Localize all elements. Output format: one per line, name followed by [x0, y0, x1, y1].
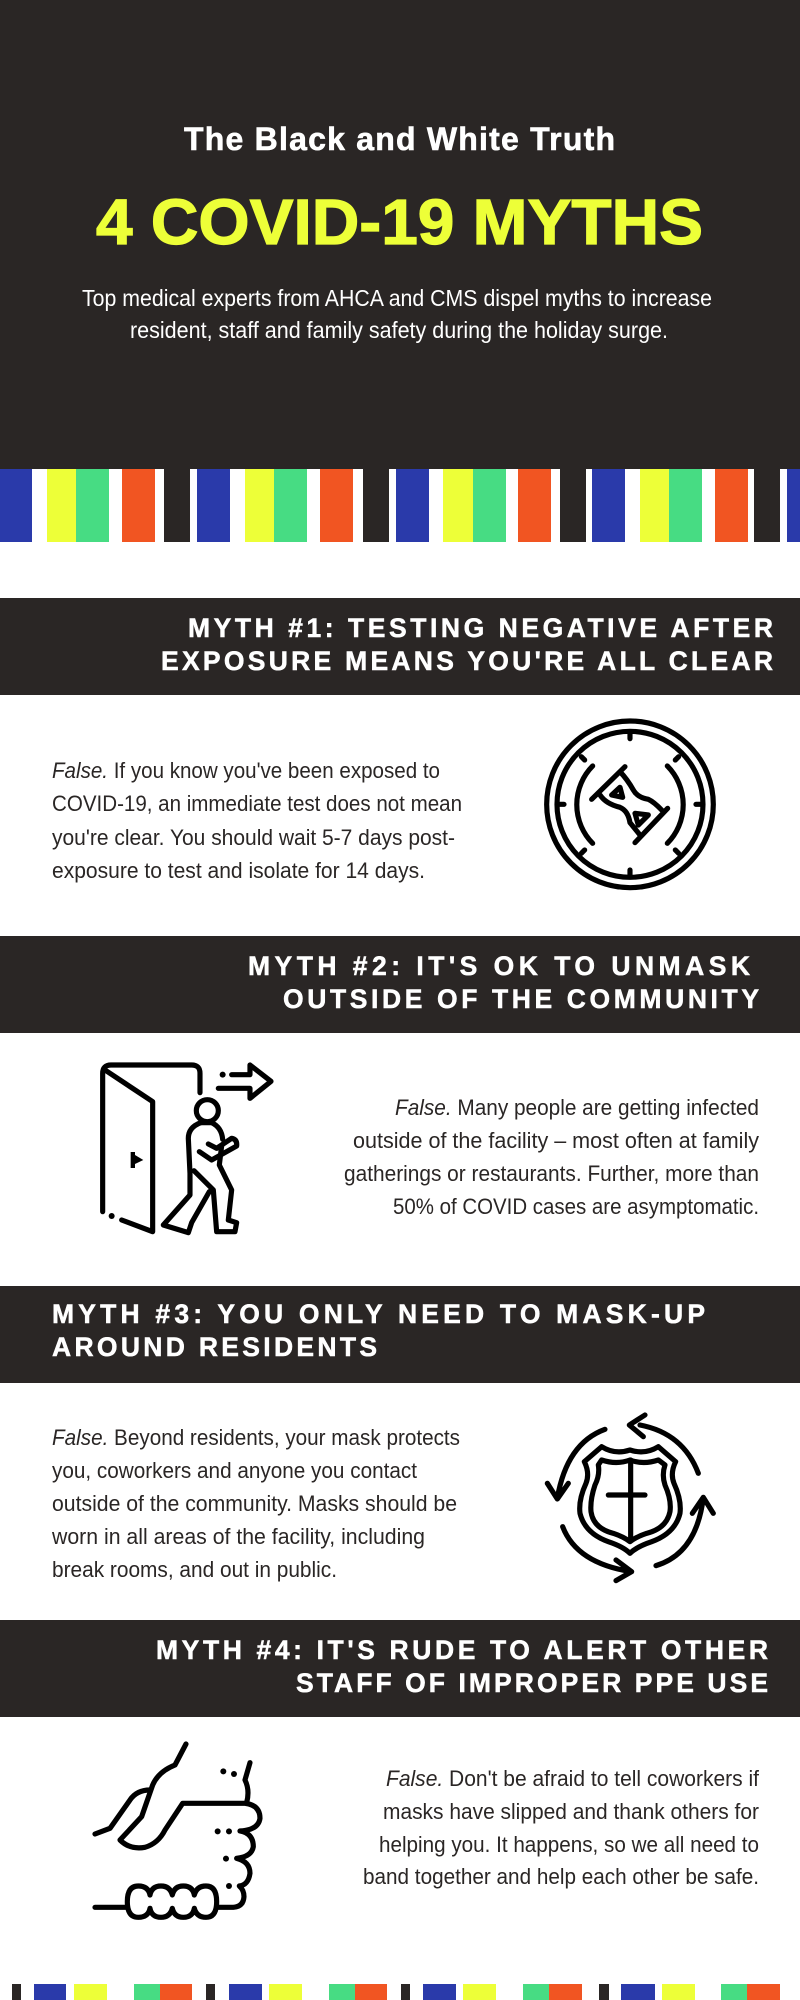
icon: handshake — [95, 1744, 260, 1917]
colour stripe band: top — [0, 469, 800, 542]
text: myth 4 explanation: False. Don't be afraid to tell coworkers if — [386, 1766, 760, 1791]
heading bar: myth 1: EXPOSURE MEANS YOU'RE ALL CLEAR — [161, 646, 773, 676]
heading bar: myth 3: MYTH #3: YOU ONLY NEED TO MASK-UP — [52, 1299, 705, 1329]
intro text — [82, 285, 712, 343]
panel: header — [0, 0, 800, 469]
text: myth 2 explanation — [344, 1095, 759, 1219]
text: myth 2 explanation: 50% of COVID cases are asymptomatic. — [393, 1194, 759, 1219]
heading bar: myth 2: OUTSIDE OF THE COMMUNITY — [283, 984, 759, 1014]
text: myth 3 explanation: outside of the community. Masks should be — [52, 1491, 457, 1516]
text: myth 3 explanation: you, coworkers and anyone you contact — [52, 1458, 417, 1483]
text: myth 4 explanation — [363, 1766, 760, 1889]
heading bar: myth 3: AROUND RESIDENTS — [52, 1332, 377, 1362]
text: myth 2 explanation: gatherings or restaurants. Further, more than — [344, 1161, 759, 1186]
text: myth 3 explanation: worn in all areas of the facility, including — [51, 1524, 425, 1549]
text: myth 1 explanation: False. If you know you've been exposed to — [52, 758, 440, 783]
heading bar: myth 1 — [0, 598, 800, 695]
title: 4 COVID-19 MYTHS — [96, 186, 703, 258]
heading bar: myth 2: MYTH #2: IT'S OK TO UNMASK — [248, 951, 750, 981]
text: myth 1 explanation: exposure to test and isolate for 14 days. — [52, 858, 425, 883]
text: myth 1 explanation — [52, 758, 462, 883]
heading bar: myth 4: MYTH #4: IT'S RUDE TO ALERT OTHER — [156, 1635, 768, 1665]
text: myth 1 explanation: COVID-19, an immediate test does not mean — [52, 791, 462, 816]
text: myth 3 explanation: False. Beyond residents, your mask protects — [52, 1425, 460, 1450]
text: myth 3 explanation — [51, 1425, 460, 1582]
icon: clock with hourglass — [547, 721, 713, 888]
heading bar: myth 4 — [0, 1620, 800, 1717]
heading bar: myth 3 — [0, 1286, 800, 1383]
text: myth 4 explanation: band together and help each other be safe. — [363, 1864, 759, 1889]
text: myth 4 explanation: masks have slipped and thank others for — [383, 1799, 759, 1824]
text: myth 1 explanation: you're clear. You should wait 5-7 days post- — [52, 825, 455, 850]
text: myth 2 explanation: outside of the facility – most often at family — [353, 1128, 759, 1153]
icon: shield with circular arrows — [547, 1415, 713, 1581]
text: myth 4 explanation: helping you. It happens, so we all need to — [379, 1832, 759, 1857]
subtitle: The Black and White Truth — [184, 121, 615, 157]
heading bar: myth 4: STAFF OF IMPROPER PPE USE — [296, 1668, 768, 1698]
heading bar: myth 1: MYTH #1: TESTING NEGATIVE AFTER — [188, 613, 773, 643]
colour stripe band: bottom — [12, 1984, 780, 2000]
heading bar: myth 2 — [0, 936, 800, 1033]
text: myth 2 explanation: False. Many people are getting infected — [395, 1095, 759, 1120]
icon: person leaving through door — [103, 1065, 271, 1233]
intro text: Top medical experts from AHCA and CMS dispel myths to increase — [82, 285, 712, 311]
text: myth 3 explanation: break rooms, and out in public. — [52, 1557, 337, 1582]
intro text: resident, staff and family safety during the holiday surge. — [130, 317, 668, 343]
